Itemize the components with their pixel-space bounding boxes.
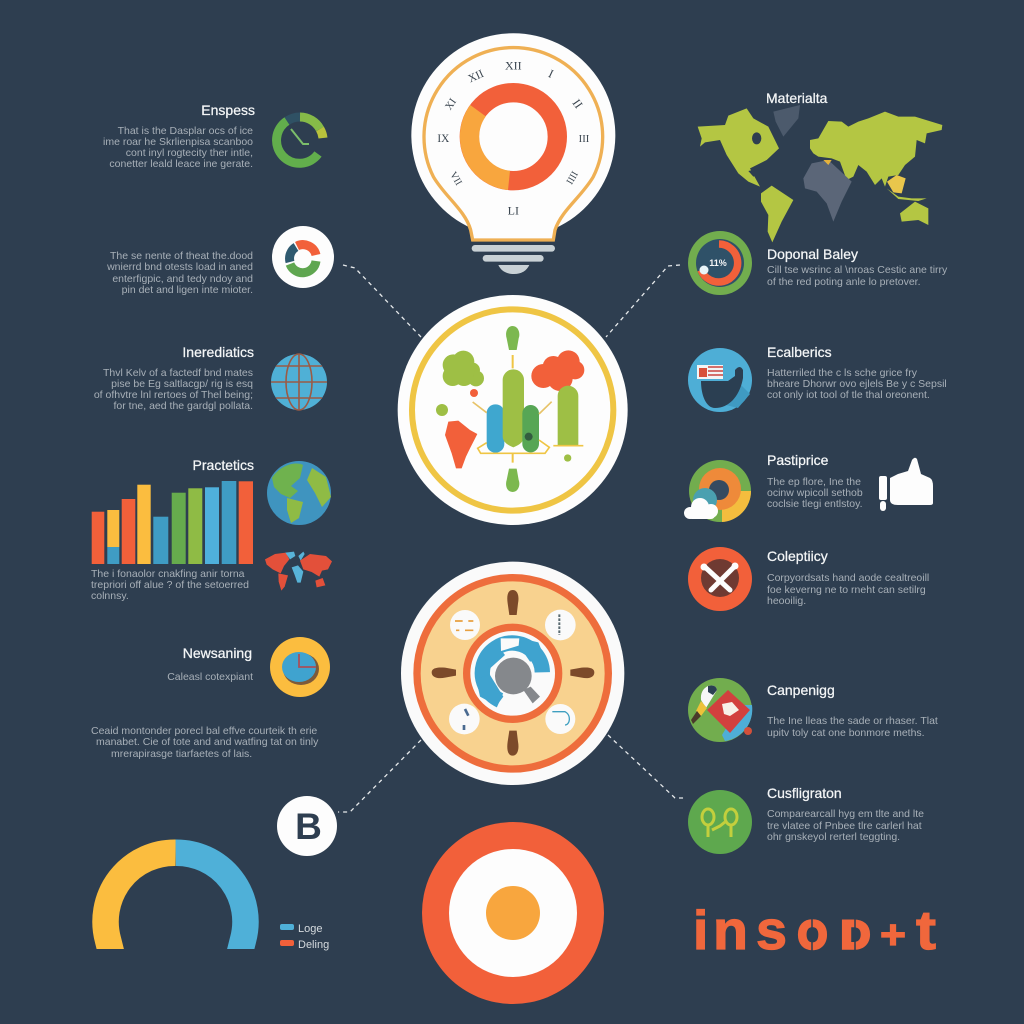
section: Ecalberics [767, 344, 947, 401]
wordmark: O [798, 914, 827, 957]
icon: light bulb clock: XI [444, 96, 459, 112]
section: Cusfligraton: ohr gnskeyol rerterl teggting. [767, 831, 900, 843]
section: Enspess: cont inyl rogtecity ther intle, [126, 147, 253, 159]
section: Ecalberics: Hatterriled the c ls sche grice fry [767, 367, 918, 379]
text block: chart caption [91, 568, 249, 602]
section: Inerediatics: of ofhvtre lnl rertoes of Thel being; [94, 389, 253, 401]
wordmark: + [880, 913, 906, 957]
section: Doponal Baley: Cill tse wsrinc al \nroas Cestic ane tirry [767, 264, 948, 276]
text block: Newsaning description: mrerapirasge tiarfaetes of lais. [111, 748, 252, 760]
icon: light bulb clock: IIII [565, 170, 581, 187]
section: Inerediatics: for tne, aed the gardgl pollata. [113, 400, 253, 412]
section: Coleptiicy [767, 548, 929, 607]
icon: percent ring: 11% [709, 258, 727, 268]
icon: target circle [422, 822, 604, 1004]
section: Coleptiicy: foe keverng ne to rneht can setilrg [767, 584, 926, 596]
icon: light bulb clock: XII [505, 58, 522, 72]
section: second description: enterfigpic, and tedy ndoy and [112, 273, 253, 285]
panel: world map [698, 90, 942, 242]
section: Cusfligraton [767, 785, 924, 843]
text block: chart caption: trepriori off alue ? of the setoerred [91, 579, 249, 591]
legend [280, 923, 329, 951]
legend: Deling [298, 939, 329, 951]
section: Newsaning: Newsaning [183, 645, 252, 661]
icon: percent ring [688, 231, 752, 295]
icon: B badge [277, 796, 337, 856]
section: Enspess [103, 102, 255, 170]
section: second description: pin det and ligen inte mioter. [122, 284, 253, 296]
icon: concentric rings with cloud [684, 460, 751, 522]
text block: chart caption: colnnsy. [91, 590, 129, 602]
icon: gear wheel emblem [401, 562, 624, 785]
icon: light bulb clock: XII [466, 68, 486, 85]
connector: top right [606, 265, 680, 337]
gauge chart [106, 853, 245, 960]
section: Cusfligraton: Cusfligraton [767, 785, 842, 801]
icon: white donut badge [272, 226, 334, 288]
section: second description [106, 250, 253, 296]
section: Canpenigg [767, 682, 938, 739]
section: Inerediatics [94, 344, 254, 412]
section: second description: The se nente of theat the.dood [110, 250, 253, 262]
connector: bottom left [338, 740, 421, 812]
section: Ecalberics: Ecalberics [767, 344, 832, 360]
connector: bottom right [608, 735, 686, 798]
section: Pastiprice: The ep flore, Ine the [767, 476, 861, 488]
text block: chart caption: The i fonaolor cnakfing anir torna [91, 568, 245, 580]
section: Cusfligraton: Comparearcall hyg em tlte and lte [767, 808, 924, 820]
icon: thumbs up [879, 458, 933, 511]
icon: green keys [688, 790, 752, 854]
section: Practetics heading: Practetics [193, 457, 254, 473]
wordmark: i [693, 899, 708, 961]
section: Coleptiicy: Corpyordsats hand aode cealtreoill [767, 572, 929, 584]
icon: yellow pie badge [270, 637, 330, 697]
icon: light bulb clock: III [579, 134, 590, 145]
wordmark [693, 899, 936, 961]
section: Enspess: conetter leald leace ine gerate. [109, 158, 253, 170]
wordmark: D [841, 914, 870, 957]
icon: blue basket [688, 348, 752, 412]
icon: light bulb clock: LI [508, 204, 519, 218]
section: Newsaning [167, 645, 253, 683]
section: Doponal Baley [767, 246, 948, 288]
section: Pastiprice: coclsie tlegi entlstoy. [767, 498, 863, 510]
section: Newsaning: Caleasl cotexpiant [167, 671, 253, 683]
icon: crossed tools [688, 547, 752, 611]
section: Pastiprice: ocinw wpicoll sethob [767, 487, 863, 499]
section: Canpenigg: The Ine lleas the sade or rhaser. Tlat [767, 715, 938, 727]
connector: top left [343, 265, 421, 337]
text block: Newsaning description [91, 725, 319, 760]
icon: light bulb clock: IX [437, 133, 449, 145]
section: Doponal Baley: Doponal Baley [767, 246, 858, 262]
section: Pastiprice [767, 452, 863, 510]
icon: light bulb clock: VII [447, 170, 464, 188]
icon: green clock ring [277, 117, 323, 163]
section: Cusfligraton: tre vlatee of Pnbee tlre carlerl hat [767, 820, 922, 832]
section: Enspess: That is the Dasplar ocs of ice [118, 125, 253, 137]
section: Coleptiicy: Coleptiicy [767, 548, 828, 564]
section: Inerediatics: pise be Eg saltlacgp/ rig is esq [111, 378, 253, 390]
section: Inerediatics: Inerediatics [182, 344, 254, 360]
section: Enspess: Enspess [201, 102, 255, 118]
icon: light bulb clock [411, 33, 615, 274]
section: Canpenigg: upitv toly cat one bonmore meths. [767, 727, 925, 739]
section: Pastiprice: Pastiprice [767, 452, 829, 468]
icon: central chart emblem [398, 295, 628, 525]
panel: world map: Materialta [766, 90, 828, 106]
text block: Newsaning description: Ceaid montonder porecl bal effve courteik th erie [91, 725, 317, 737]
bar chart [92, 481, 253, 564]
icon: red world map [265, 552, 332, 591]
wordmark: t [916, 899, 936, 961]
section: Ecalberics: bheare Dhorwr ovo ejlels Be y c Sepsil [767, 378, 947, 390]
icon: light bulb clock: I [546, 67, 556, 81]
section: Doponal Baley: of the red poting anle lo pretover. [767, 276, 921, 288]
section: Canpenigg: Canpenigg [767, 682, 835, 698]
section: Enspess: ime roar he Skrlienpisa scanboo [103, 136, 253, 148]
section: Inerediatics: Thvl Kelv of a factedf bnd mates [103, 367, 253, 379]
wordmark: n [713, 899, 748, 961]
icon: B badge: B [295, 806, 322, 847]
section: second description: wnierrd bnd otests load in aned [106, 261, 253, 273]
wordmark: s [756, 899, 787, 961]
section: Ecalberics: cot only iot tool of tle thal oreonent. [767, 389, 930, 401]
icon: light bulb clock: II [570, 96, 586, 111]
icon: wire globe [271, 354, 327, 410]
icon: paint brush and diamond [688, 678, 752, 742]
text block: Newsaning description: manabet. Cie of tote and and watfing tat on tinly [96, 736, 319, 748]
icon: earth [267, 461, 331, 525]
legend: Loge [298, 923, 322, 935]
section: Coleptiicy: heooilig. [767, 595, 806, 607]
